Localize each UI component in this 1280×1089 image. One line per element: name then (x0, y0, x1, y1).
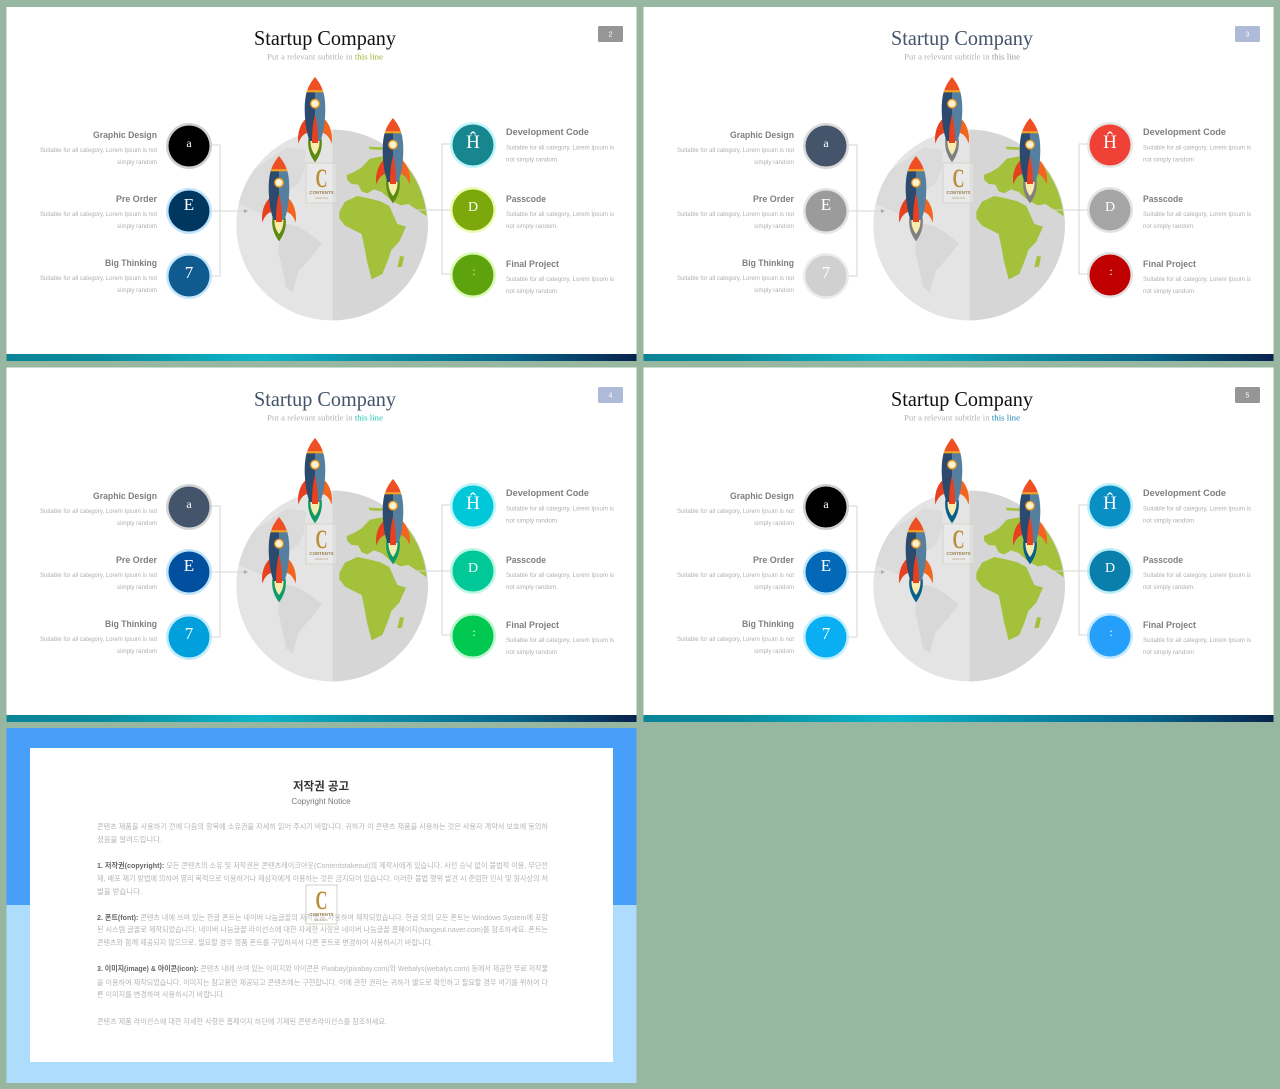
item: Passcode: not simply random. (1143, 585, 1195, 591)
item: Final Project: Final Project (506, 259, 560, 270)
rocket right (1013, 118, 1047, 203)
watermark logo: CONTENTS (946, 190, 971, 195)
section 3 image and icon: 른 이미지를 변경하여 사용하시기 바랍니다. (97, 990, 225, 999)
item: Graphic Design: simply random (117, 521, 157, 527)
icon circle a (803, 123, 849, 169)
slide background (644, 7, 1274, 354)
item: Pre Order: simply random (117, 585, 157, 591)
section 2 font (97, 913, 548, 947)
item: Pre Order: simply random (754, 224, 794, 230)
panel: slide 5 (644, 368, 1274, 722)
item: Big Thinking: simply random (117, 649, 157, 655)
section 2 font: 콘텐츠와 함께 제공되지 않으므로, 필요할 경우 정품 폰트를 구입하셔서 다른 폰트로 변경하여 사용하시기 바랍니다. (97, 938, 433, 947)
icon circle E (166, 549, 212, 595)
rocket left (899, 156, 933, 241)
item: Big Thinking (40, 258, 157, 294)
connector lines right (1050, 144, 1089, 274)
item: Final Project: Suitable for all category, Lorem Ipsum is (506, 638, 614, 644)
item: Development Code: Suitable for all category, Lorem Ipsum is (1143, 506, 1251, 512)
item: Pre Order: Suitable for all category, Lorem Ipsum is not (40, 573, 157, 579)
item: Final Project (1143, 620, 1251, 656)
item: Graphic Design: Graphic Design (730, 491, 794, 502)
icon circle a: a (823, 136, 829, 150)
item: Development Code (1143, 127, 1251, 164)
icon circle 7: 7 (822, 624, 831, 643)
item: Final Project: Final Project (1143, 620, 1197, 631)
subtitle: Put a relevant subtitle in this line (267, 412, 383, 422)
watermark logo: HAVE FUN (952, 196, 965, 200)
icon circle H (1087, 483, 1133, 529)
section 3 image and icon: 3. 이미지(image) & 아이콘(icon): 콘텐츠 내에 쓰여 있는 이미지와 아이콘은 Pixabay(pixabay.com)와 Webalys(webalys.com) 등에서 제공한 무료 저작물 (97, 964, 548, 973)
globe (230, 130, 430, 320)
icon circle a: a (186, 497, 192, 511)
item: Passcode: not simply random. (1143, 224, 1195, 230)
item: Passcode: Passcode (1143, 194, 1183, 205)
connector lines right (413, 505, 452, 635)
item: Final Project: Final Project (506, 620, 560, 631)
item: Pre Order: Pre Order (753, 194, 794, 205)
connector lines left (211, 145, 245, 276)
item: Pre Order: Pre Order (116, 194, 157, 205)
icon circle D (1087, 548, 1133, 594)
icon circle H: Ĥ (1103, 492, 1117, 514)
item: Pre Order: Suitable for all category, Lorem Ipsum is not (40, 212, 157, 218)
item: Development Code: Development Code (1143, 488, 1226, 499)
rocket top (935, 77, 969, 162)
icon circle a (803, 484, 849, 530)
connector lines left (848, 506, 882, 637)
icon circle H: Ĥ (466, 492, 480, 514)
closing line: 콘텐츠 제품 라이선스에 대한 자세한 사항은 홈페이지 하단에 기재된 콘텐츠라이선스를 참조하세요. (97, 1017, 387, 1026)
item: Final Project: Final Project (1143, 259, 1197, 270)
item: Passcode: Suitable for all category, Lorem Ipsum is (506, 212, 614, 218)
item: Passcode: Suitable for all category, Lorem Ipsum is (1143, 573, 1251, 579)
item: Development Code: Development Code (1143, 127, 1226, 138)
item: Final Project: not simply random (1143, 650, 1194, 656)
item: Graphic Design: Graphic Design (93, 491, 157, 502)
title: Startup Company (254, 387, 396, 411)
rocket left (262, 517, 296, 602)
icon circle 7: 7 (185, 263, 194, 282)
item: Passcode: Passcode (506, 555, 546, 566)
icon circle a: a (823, 497, 829, 511)
blue upper background (6, 728, 636, 905)
item: Final Project (1143, 259, 1251, 295)
globe (867, 491, 1067, 681)
item: Graphic Design (677, 491, 794, 527)
panel: copyright notice slide (6, 728, 636, 1083)
item: Development Code: Suitable for all category, Lorem Ipsum is (506, 506, 614, 512)
item: Final Project: Suitable for all category, Lorem Ipsum is (506, 277, 614, 283)
bottom gradient bar (6, 715, 636, 722)
page number badge: 3 (1246, 32, 1250, 38)
intro paragraph: 셨음을 알려드립니다. (97, 835, 162, 844)
icon circle 7: 7 (185, 624, 194, 643)
item: Pre Order (677, 555, 794, 591)
watermark logo: CONTENTS (309, 551, 334, 556)
item: Development Code: not simply random (1143, 518, 1194, 524)
icon circle D: D (1105, 200, 1115, 215)
slide background (6, 7, 636, 354)
item: Pre Order: simply random (754, 585, 794, 591)
arrow head (244, 570, 248, 574)
page number badge (1235, 26, 1260, 42)
item: Passcode: Passcode (1143, 555, 1183, 566)
item: Final Project (506, 620, 614, 656)
item: Big Thinking: simply random (117, 288, 157, 294)
connector lines left (211, 506, 245, 637)
item: Development Code: Development Code (506, 127, 589, 138)
icon circle colon: : (1109, 625, 1113, 639)
watermark logo (943, 524, 974, 564)
icon circle a (166, 484, 212, 530)
item: Graphic Design: simply random (754, 521, 794, 527)
slide background (644, 368, 1274, 715)
title: Startup Company (891, 26, 1033, 50)
icon circle colon: : (472, 625, 476, 639)
icon circle D (450, 548, 496, 594)
watermark logo: CONTENTS (946, 551, 971, 556)
item: Passcode: Suitable for all category, Lorem Ipsum is (506, 573, 614, 579)
section 1 copyright (97, 861, 548, 896)
icon circle 7: 7 (822, 263, 831, 282)
rocket top (298, 438, 332, 523)
watermark logo: C (316, 525, 328, 554)
notice heading: 저작권 공고 (293, 779, 349, 793)
item: Big Thinking (677, 619, 794, 655)
icon circle H: Ĥ (466, 131, 480, 153)
title: Startup Company (254, 26, 396, 50)
watermark logo: HAVE FUN (315, 557, 328, 561)
section 3 image and icon: 을 이용하여 제작되었습니다. 이미지는 참고용만 제공되고 콘텐츠에는 구현합니다. 이에 관한 권리는 귀하가 별도로 확인하고 필요할 경우 여기를 위하여 다 (97, 978, 548, 987)
item: Passcode (1143, 194, 1251, 230)
globe (230, 491, 430, 681)
icon circle H: Ĥ (1103, 131, 1117, 153)
item: Development Code (506, 127, 614, 164)
item: Graphic Design (40, 491, 157, 527)
watermark logo (306, 885, 337, 924)
icon circle 7 (803, 614, 849, 660)
item: Big Thinking: Suitable for all category, Lorem Ipsum is not (677, 276, 794, 282)
icon circle 7 (803, 253, 849, 299)
icon circle D: D (468, 200, 478, 215)
item: Big Thinking: simply random (754, 649, 794, 655)
watermark logo: CONTENTS (309, 912, 334, 917)
section 2 font: 된 시스템 글꼴로 제작되었습니다. 네이버 나눔글꼴 라이선스에 대한 자세한 사항은 네이버 나눔글꼴 홈페이지(hangeul.naver.com)를 참조하세요. 폰트는 (97, 925, 548, 934)
subtitle: Put a relevant subtitle in this line (904, 52, 1020, 62)
icon circle 7 (166, 253, 212, 299)
item: Final Project: not simply random (1143, 289, 1194, 295)
title: Startup Company (891, 387, 1033, 411)
item: Pre Order: Pre Order (116, 555, 157, 566)
item: Development Code: not simply random (506, 158, 557, 164)
item: Final Project: not simply random (506, 289, 557, 295)
item: Big Thinking (40, 619, 157, 655)
item: Big Thinking: Big Thinking (742, 258, 794, 269)
item: Big Thinking: Suitable for all category, Lorem Ipsum is not (40, 637, 157, 643)
watermark logo: C (316, 886, 328, 915)
notice subheading: Copyright Notice (291, 797, 351, 806)
item: Passcode (506, 555, 614, 591)
icon circle colon (1087, 613, 1133, 659)
item: Graphic Design: Graphic Design (93, 130, 157, 141)
rocket top (298, 77, 332, 162)
item: Passcode (1143, 555, 1251, 591)
item: Big Thinking: Big Thinking (105, 258, 157, 269)
bottom gradient bar (644, 354, 1274, 361)
panel: slide 2 (6, 7, 636, 361)
section 2 font: 2. 폰트(font): 콘텐츠 내에 쓰여 있는 한글 폰트는 네이버 나눔글꼴의 저작물을 사용하여 제작되었습니다. 한글 외의 모든 폰트는 Windows System에 포함 (97, 913, 548, 922)
bottom gradient bar (6, 354, 636, 361)
icon circle D: D (1105, 561, 1115, 576)
panel: slide 4 (6, 368, 636, 722)
item: Pre Order: Suitable for all category, Lorem Ipsum is not (677, 573, 794, 579)
intro paragraph (97, 822, 548, 844)
item: Development Code: not simply random (1143, 158, 1194, 164)
item: Graphic Design: Suitable for all category, Lorem Ipsum is not (40, 148, 157, 154)
watermark logo (306, 163, 337, 203)
page number badge (598, 387, 623, 403)
item: Big Thinking (677, 258, 794, 294)
icon circle D: D (468, 561, 478, 576)
icon circle H (450, 483, 496, 529)
item: Graphic Design: Suitable for all category, Lorem Ipsum is not (677, 148, 794, 154)
subtitle: Put a relevant subtitle in this line (904, 412, 1020, 422)
rocket left (899, 517, 933, 602)
rocket right (376, 479, 410, 564)
item: Pre Order: Pre Order (753, 555, 794, 566)
bottom gradient bar (644, 715, 1274, 722)
arrow head (881, 570, 885, 574)
item: Graphic Design: Suitable for all category, Lorem Ipsum is not (40, 509, 157, 515)
item: Passcode (506, 194, 614, 230)
item: Development Code: Suitable for all category, Lorem Ipsum is (1143, 146, 1251, 152)
watermark logo: C (316, 164, 328, 193)
icon circle E (803, 188, 849, 234)
item: Passcode: Suitable for all category, Lorem Ipsum is (1143, 212, 1251, 218)
slide background (6, 368, 636, 715)
section 3 image and icon (97, 964, 548, 999)
connector lines left (848, 145, 882, 276)
icon circle colon: : (472, 264, 476, 278)
page number badge: 2 (609, 32, 613, 38)
item: Graphic Design: simply random (754, 160, 794, 166)
item: Graphic Design (677, 130, 794, 166)
light blue lower background (6, 905, 636, 1083)
item: Big Thinking: Big Thinking (105, 619, 157, 630)
icon circle E: E (821, 556, 831, 575)
section 1 copyright: 벌을 받습니다. (97, 887, 142, 896)
item: Pre Order (40, 555, 157, 591)
rocket left (262, 156, 296, 241)
white notice card (30, 748, 613, 1062)
icon circle H (450, 122, 496, 168)
item: Pre Order (40, 194, 157, 230)
watermark logo: HAVE FUN (315, 918, 328, 922)
watermark logo: CONTENTS (309, 190, 334, 195)
icon circle E: E (184, 195, 194, 214)
item: Big Thinking: Big Thinking (742, 619, 794, 630)
icon circle E (803, 549, 849, 595)
item: Final Project: Suitable for all category, Lorem Ipsum is (1143, 277, 1251, 283)
item: Pre Order: simply random (117, 224, 157, 230)
item: Graphic Design: simply random (117, 160, 157, 166)
item: Development Code: Suitable for all category, Lorem Ipsum is (506, 146, 614, 152)
watermark logo (306, 524, 337, 564)
item: Passcode: Passcode (506, 194, 546, 205)
item: Graphic Design: Suitable for all category, Lorem Ipsum is not (677, 509, 794, 515)
item: Pre Order (677, 194, 794, 230)
subtitle: Put a relevant subtitle in this line (267, 52, 383, 62)
rocket top (935, 438, 969, 523)
item: Development Code: Development Code (506, 488, 589, 499)
section 1 copyright: 재, 배포 재기 방법에 의하여 영리 목적으로 이용하거나 제삼자에게 이용하는 것은 금지되어 있습니다. 이러한 불법 행위 발견 시 준엄한 민사 및 형사상의 처 (97, 874, 548, 883)
icon circle colon (1087, 252, 1133, 298)
item: Graphic Design (40, 130, 157, 166)
rocket right (376, 118, 410, 203)
item: Development Code (506, 488, 614, 524)
item: Final Project (506, 259, 614, 295)
watermark logo: HAVE FUN (315, 196, 328, 200)
page number badge: 4 (609, 392, 613, 400)
icon circle 7 (166, 614, 212, 660)
connector lines right (1050, 505, 1089, 635)
item: Big Thinking: simply random (754, 288, 794, 294)
item: Final Project: not simply random (506, 650, 557, 656)
icon circle H (1087, 122, 1133, 168)
item: Development Code (1143, 488, 1251, 524)
icon circle a (166, 123, 212, 169)
item: Passcode: not simply random. (506, 224, 558, 230)
watermark logo: C (952, 525, 964, 554)
icon circle D (1087, 187, 1133, 233)
item: Passcode: not simply random. (506, 585, 558, 591)
item: Graphic Design: Graphic Design (730, 130, 794, 141)
rocket right (1013, 479, 1047, 564)
icon circle D (450, 187, 496, 233)
arrow head (244, 209, 248, 213)
icon circle colon (450, 613, 496, 659)
icon circle E (166, 188, 212, 234)
icon circle colon (450, 252, 496, 298)
icon circle a: a (186, 136, 192, 150)
item: Development Code: not simply random (506, 518, 557, 524)
page number badge: 5 (1246, 392, 1250, 400)
arrow head (881, 209, 885, 213)
section 1 copyright: 1. 저작권(copyright): 모든 콘텐츠의 소유 및 저작권은 콘텐츠레이크아웃(Contentstakeout)의 제작사에게 있습니다. 사전 승낙 없이 불법적 이용, 무단전 (97, 861, 548, 870)
icon circle E: E (184, 556, 194, 575)
globe (867, 130, 1067, 320)
watermark logo: C (952, 164, 964, 193)
page number badge (1235, 387, 1260, 403)
icon circle colon: : (1109, 264, 1113, 278)
icon circle E: E (821, 195, 831, 214)
connector lines right (413, 144, 452, 274)
item: Pre Order: Suitable for all category, Lorem Ipsum is not (677, 212, 794, 218)
page number badge (598, 26, 623, 42)
intro paragraph: 콘텐츠 제품을 사용하기 전에 다음의 항목에 소유권을 자세히 읽어 주시기 바랍니다. 귀하가 이 콘텐츠 제품을 사용하는 것은 사용자 계약서 보호에 동의하 (97, 822, 548, 831)
panel: slide 3 (644, 7, 1274, 361)
watermark logo: HAVE FUN (952, 557, 965, 561)
item: Big Thinking: Suitable for all category, Lorem Ipsum is not (40, 276, 157, 282)
item: Big Thinking: Suitable for all category, Lorem Ipsum is not (677, 637, 794, 643)
item: Final Project: Suitable for all category, Lorem Ipsum is (1143, 638, 1251, 644)
watermark logo (943, 163, 974, 203)
